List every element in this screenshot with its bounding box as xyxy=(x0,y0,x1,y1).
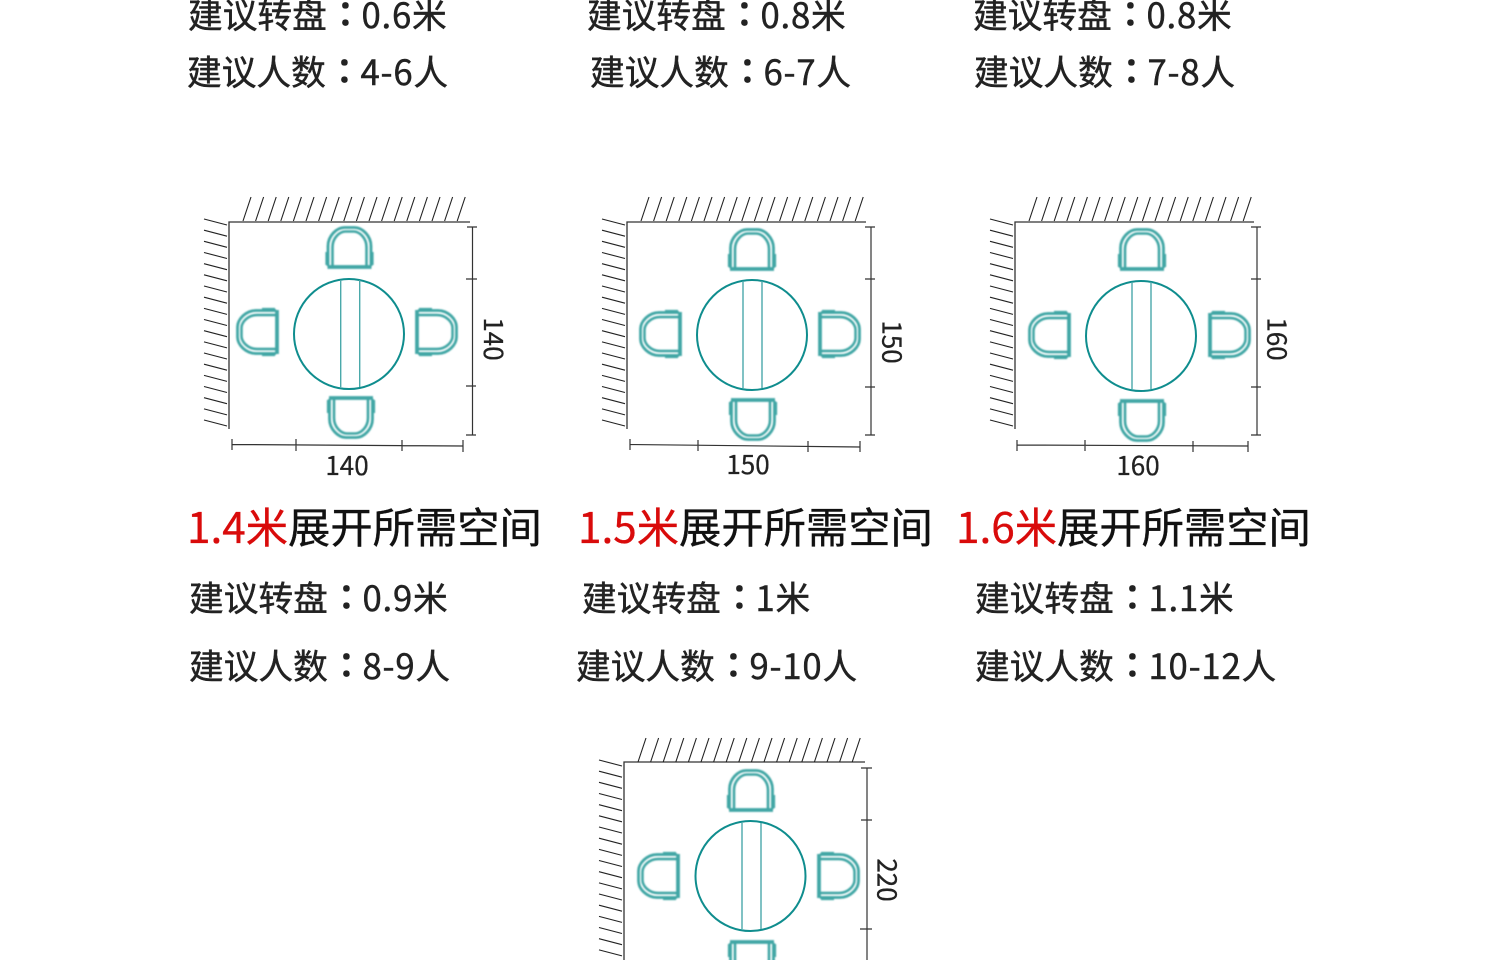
text block: column 1 top specs xyxy=(187,0,448,95)
text block: 1.6 metre specs xyxy=(975,568,1276,689)
floor plan diagram: 150 table: 150 xyxy=(726,445,770,482)
text block: column 3 top specs xyxy=(973,0,1235,95)
floor plan diagram: 140 table: 140 xyxy=(476,317,513,361)
text block: 1.5 metre specs: 1 xyxy=(755,571,776,621)
text block: 1.5 metre specs: 建议人数 xyxy=(576,639,715,689)
text block: 1.5 metre specs: 建议转盘 xyxy=(582,571,721,621)
text block: 1.4 metre specs: 米 xyxy=(413,571,448,621)
floor plan diagram: 220 table xyxy=(599,738,906,960)
text block: 1.6 metre specs: ： xyxy=(1124,636,1158,686)
text block: 1.5 metre specs: 人 xyxy=(822,639,857,689)
text block: column 3 top specs: 7-8 xyxy=(1147,45,1200,95)
heading: 1.4 metre: 1.4米展开所需空间 xyxy=(187,495,542,556)
floor plan diagram: 150 table: 150 xyxy=(874,320,912,364)
text block: column 1 top specs: ： xyxy=(336,42,370,92)
floor plan diagram: 140 table xyxy=(204,197,513,483)
text block: 1.6 metre specs: 1.1 xyxy=(1148,571,1199,621)
floor plan diagram: 160 table xyxy=(990,197,1296,483)
text block: 1.5 metre specs xyxy=(576,568,857,689)
text block: column 3 top specs: ： xyxy=(1123,42,1157,92)
floor plan diagram: 150 table xyxy=(602,197,912,482)
text block: 1.6 metre specs: 10-12 xyxy=(1148,639,1242,689)
text block: 1.6 metre specs: 建议转盘 xyxy=(975,571,1114,621)
text block: 1.4 metre specs: 0.9 xyxy=(362,571,413,621)
text block: 1.4 metre specs: 8-9 xyxy=(362,639,415,689)
text block: 1.5 metre specs: ： xyxy=(725,636,759,686)
floor plan diagram: 160 table: 160 xyxy=(1116,446,1160,483)
text block: 1.6 metre specs: 米 xyxy=(1199,571,1234,621)
text block: 1.6 metre specs: 人 xyxy=(1242,639,1276,689)
text block: 1.5 metre specs: 9-10 xyxy=(749,639,822,689)
text block: 1.6 metre specs: ： xyxy=(1124,568,1158,618)
text block: 1.4 metre specs: ： xyxy=(338,636,372,686)
text block: column 1 top specs: 建议人数 xyxy=(187,45,326,95)
text block: column 2 top specs: 建议人数 xyxy=(590,45,729,95)
text block: column 2 top specs xyxy=(587,0,851,95)
text block: 1.4 metre specs: 人 xyxy=(415,639,450,689)
text block: column 3 top specs: 建议人数 xyxy=(974,45,1113,95)
floor plan diagram: 140 table: 140 xyxy=(325,446,369,483)
text block: column 2 top specs: 人 xyxy=(816,45,851,95)
floor plan diagram: 160 table: 160 xyxy=(1260,317,1296,361)
text block: column 1 top specs: 人 xyxy=(413,45,448,95)
text block: column 2 top specs: ： xyxy=(739,42,773,92)
text block: 1.4 metre specs xyxy=(189,568,450,689)
text block: 1.5 metre specs: ： xyxy=(731,568,765,618)
heading: 1.5 metre: 1.5米展开所需空间 xyxy=(578,495,933,556)
text block: column 3 top specs: 人 xyxy=(1200,45,1235,95)
text block: 1.5 metre specs: 米 xyxy=(776,571,810,621)
text block: 1.4 metre specs: ： xyxy=(338,568,372,618)
floor plan diagram: 220 table: 220 xyxy=(870,858,906,902)
text block: 1.6 metre specs: 建议人数 xyxy=(975,639,1114,689)
text block: column 2 top specs: 6-7 xyxy=(763,45,816,95)
text block: column 1 top specs: 4-6 xyxy=(360,45,413,95)
text block: 1.4 metre specs: 建议人数 xyxy=(189,639,328,689)
text block: 1.4 metre specs: 建议转盘 xyxy=(189,571,328,621)
heading: 1.6 metre: 1.6米展开所需空间 xyxy=(956,495,1311,556)
